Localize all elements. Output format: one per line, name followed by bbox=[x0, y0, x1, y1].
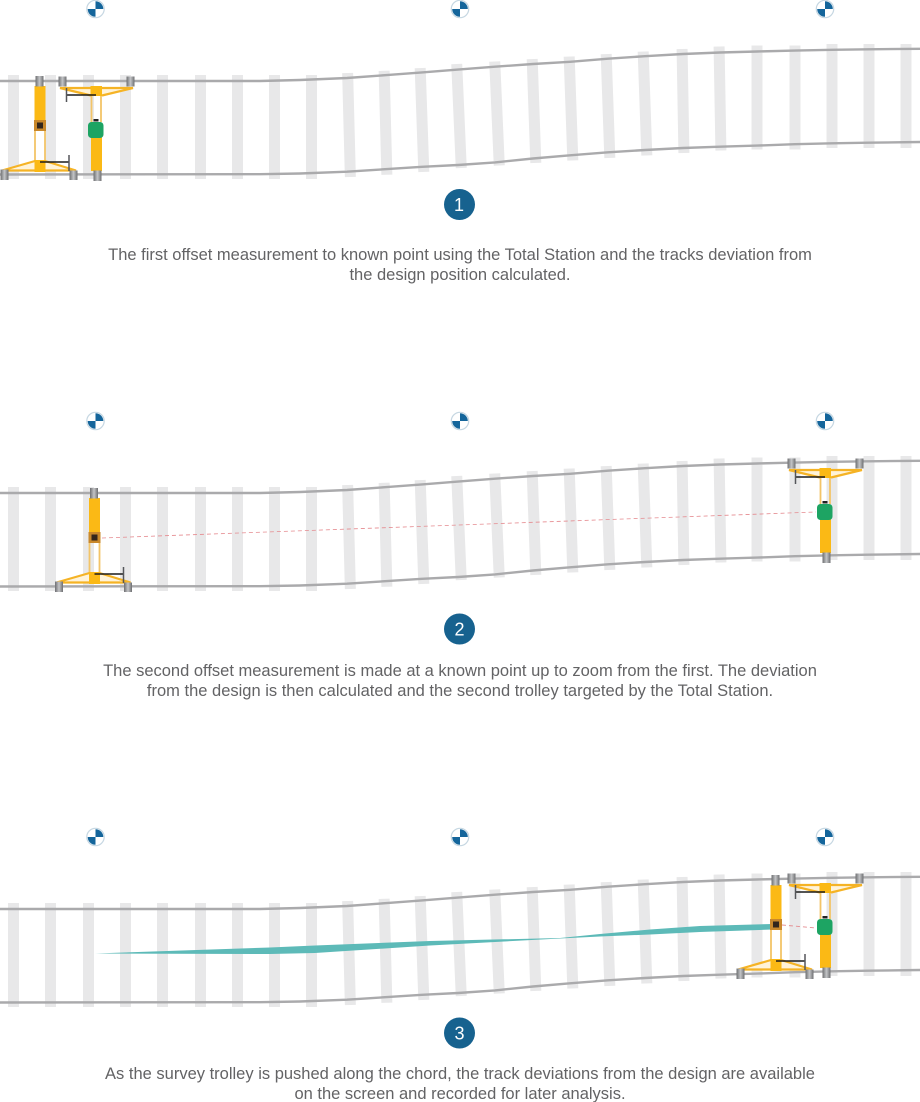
deviation wedge bbox=[95, 924, 772, 954]
laser line: step 3 bbox=[782, 925, 816, 928]
panel: step 1 bbox=[0, 0, 920, 284]
panel: step 3 bbox=[0, 828, 920, 1102]
number badge 1 bbox=[444, 189, 475, 220]
number badge 3 bbox=[444, 1018, 475, 1048]
target marker left: step 2 bbox=[87, 412, 104, 430]
survey trolley: step 1 bbox=[0, 76, 78, 180]
caption: step 1: the design position calculated. bbox=[349, 266, 571, 284]
caption: step 1: The first offset measurement to known point using the Total Station and the tracks deviation from bbox=[108, 246, 812, 264]
panel: step 2 bbox=[0, 412, 920, 700]
target marker right: step 2 bbox=[816, 412, 834, 430]
target marker centre: step 1 bbox=[451, 0, 469, 18]
target marker left: step 1 bbox=[87, 0, 104, 18]
number badge 1: 1 bbox=[454, 195, 464, 215]
number badge 3: 3 bbox=[454, 1024, 465, 1044]
caption: step 2: The second offset measurement is made at a known point up to zoom from the first. The deviation bbox=[103, 662, 817, 680]
target marker centre: step 2 bbox=[451, 412, 469, 430]
caption: step 3: As the survey trolley is pushed along the chord, the track deviations from the design are available bbox=[105, 1065, 815, 1083]
target marker left: step 3 bbox=[87, 828, 104, 846]
survey trolley: step 3 bbox=[736, 875, 814, 979]
caption: step 2: from the design is then calculated and the second trolley targeted by the Total Station. bbox=[147, 682, 773, 700]
total station trolley: step 2 bbox=[788, 458, 864, 563]
track: step 3 bbox=[0, 872, 920, 1007]
total station trolley: step 1 bbox=[58, 76, 134, 181]
total station trolley: step 3 bbox=[788, 874, 864, 978]
laser line: step 2 bbox=[102, 512, 816, 538]
track: step 2 bbox=[0, 456, 920, 591]
survey trolley: step 2 bbox=[55, 488, 132, 592]
number badge 2 bbox=[444, 614, 475, 644]
number badge 2: 2 bbox=[454, 620, 465, 640]
target marker right: step 3 bbox=[816, 828, 834, 846]
target marker centre: step 3 bbox=[451, 828, 469, 846]
target marker right: step 1 bbox=[816, 0, 834, 18]
track: step 1 bbox=[0, 44, 920, 179]
